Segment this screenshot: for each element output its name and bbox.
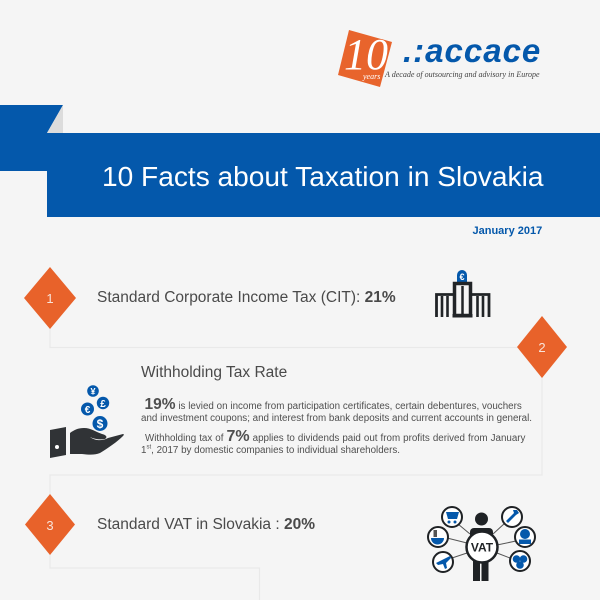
fact 2 paragraph: 19% is levied on income from participation certificates, certain debentures, vouchers (144, 396, 522, 413)
logo mark: orange 10 years square: 10 (344, 30, 388, 79)
diamond 3 (25, 494, 75, 555)
icon: hand with coins: $ (97, 417, 104, 431)
icon: hand with coins (50, 385, 124, 458)
logo mark: orange 10 years square: years (362, 72, 380, 81)
fact 2 paragraph: 1st, 2017 by domestic companies to individual shareholders. (141, 445, 400, 456)
diamond 2 (517, 316, 567, 378)
title: 10 Facts about Taxation in Slovakia (102, 161, 543, 192)
logo tagline: A decade of outsourcing and advisory in Europe (385, 70, 540, 79)
diamond 1: 1 (46, 291, 54, 306)
icon: bank building with euro (436, 270, 489, 318)
diamond 2: 2 (538, 340, 546, 355)
icon: VAT person with spokes: VAT (471, 540, 494, 554)
icon: hand with coins: € (85, 405, 91, 416)
title ribbon (0, 105, 600, 217)
fact 1 text: Standard Corporate Income Tax (CIT): 21% (97, 289, 396, 306)
icon: hand with coins: £ (100, 399, 106, 410)
fact 2 paragraph (141, 396, 532, 456)
fact 2 paragraph: Withholding tax of 7% applies to dividends paid out from profits derived from January (145, 428, 525, 445)
icon: bank building with euro: € (459, 272, 465, 282)
fact 3 text: Standard VAT in Slovakia : 20% (97, 516, 315, 533)
logo wordmark: .:accace (403, 32, 541, 69)
icon: VAT person with spokes (428, 507, 535, 581)
diamond 1 (24, 267, 76, 329)
date: January 2017 (472, 225, 542, 237)
icon: hand with coins: ¥ (90, 386, 96, 396)
fact 2 heading: Withholding Tax Rate (141, 364, 287, 381)
diamond 3: 3 (46, 518, 54, 533)
fact 2 paragraph: and investment coupons; and interest from bank deposits and current accounts in general. (141, 413, 532, 424)
